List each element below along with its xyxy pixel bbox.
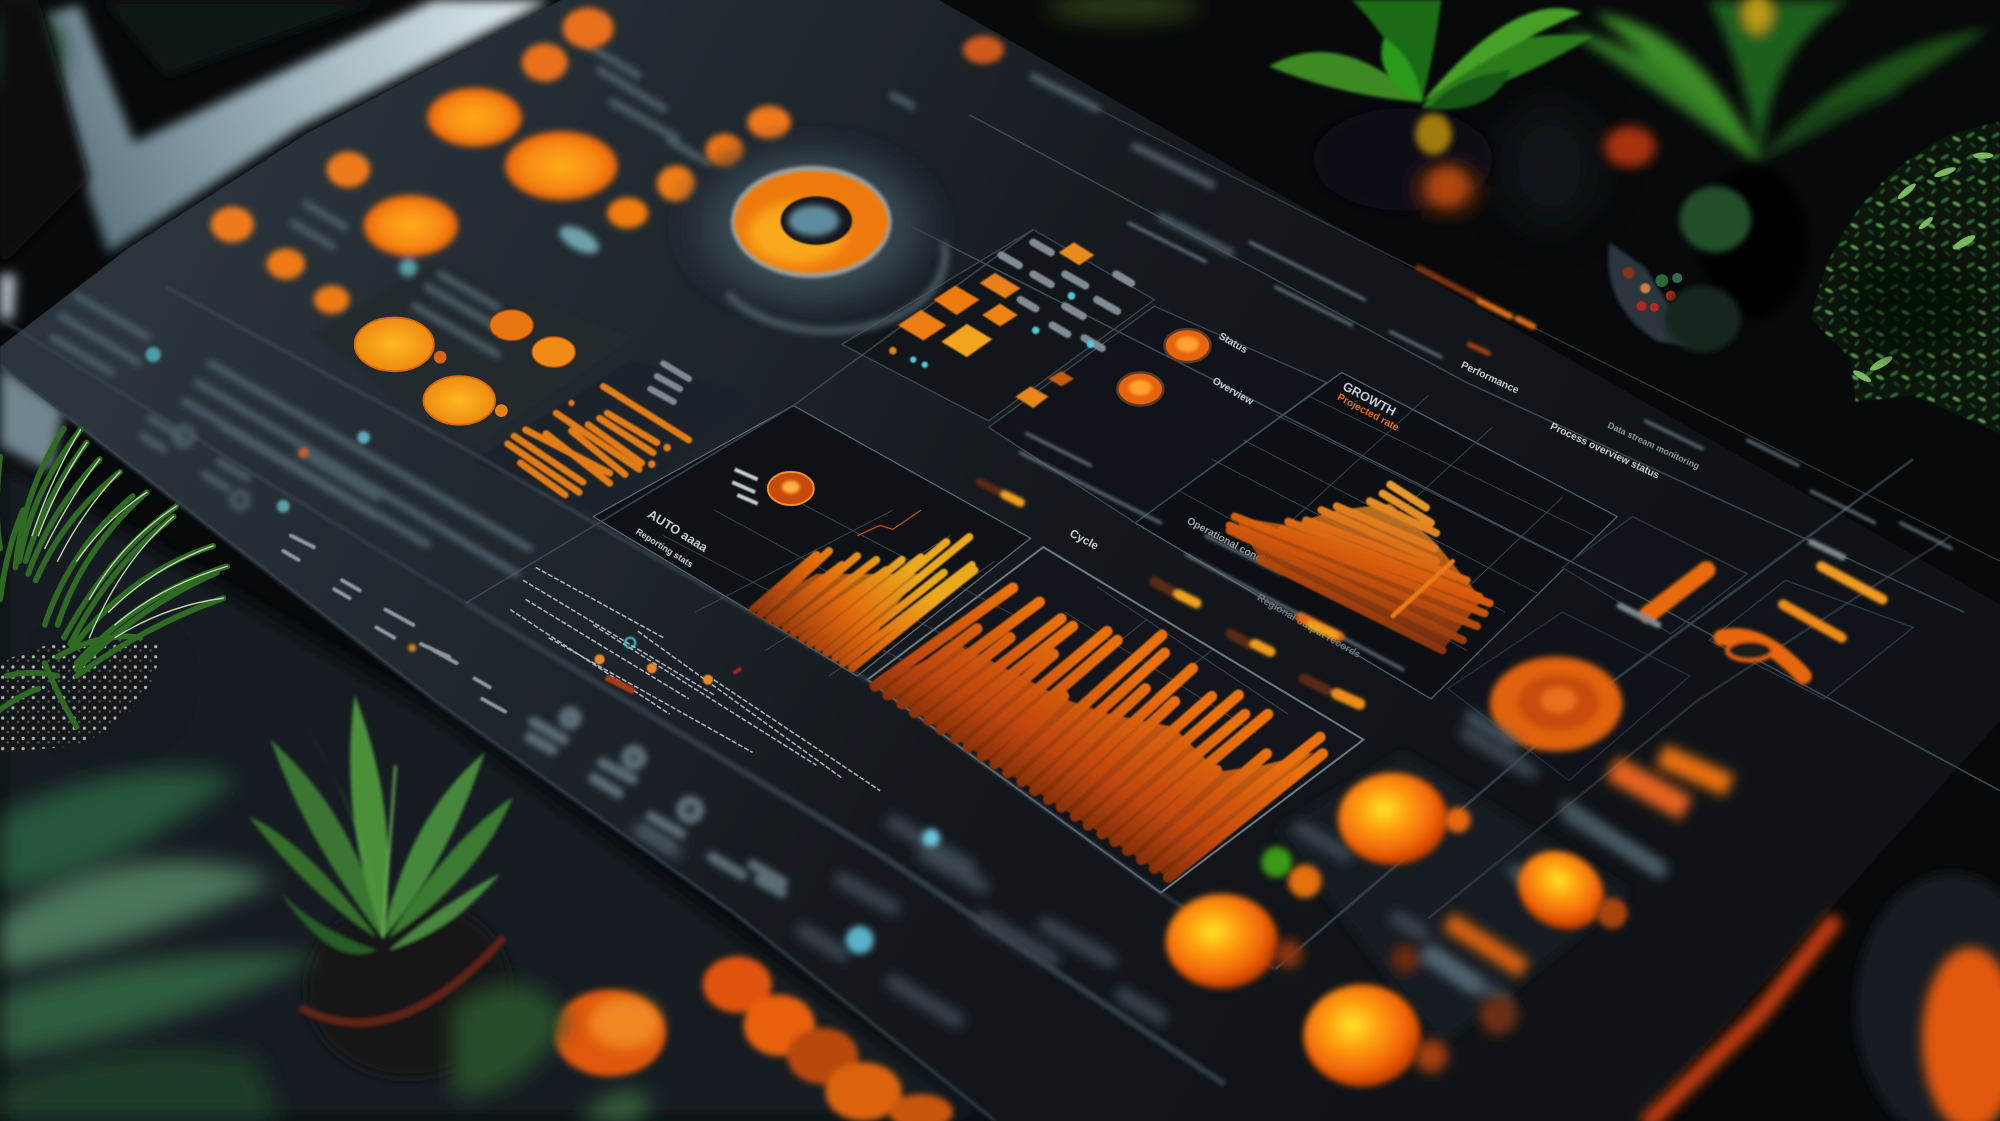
text labels: far chips (638, 733, 1658, 1020)
text labels: crisp tiny captions: Overview (1210, 376, 1255, 408)
chart grids (663, 395, 1594, 733)
text labels: crisp tiny captions: AUTO aaaa (645, 506, 711, 555)
text labels: crisp tiny captions: Data stream monitoring (1606, 420, 1701, 471)
text labels: crisp tiny captions: Status (1217, 331, 1249, 356)
red edge glow (1645, 918, 1837, 1121)
indicator pills (980, 268, 1533, 704)
glowing buttons lower right (1166, 773, 1627, 1087)
status dots on left rows (146, 347, 416, 652)
plant: top centre (1269, 0, 1594, 210)
text labels: crisp tiny captions: Cycle (1067, 528, 1100, 553)
light band: paper reflection (0, 0, 551, 319)
text labels: crisp tiny captions: Reporting stats (634, 526, 695, 569)
circle tiles: blurred upper row (211, 8, 1004, 314)
corner dial (1856, 874, 2000, 1121)
chart panels (313, 230, 1913, 1046)
donut card (1490, 657, 1622, 751)
blurred orange blocks (1392, 714, 1729, 1034)
donut gauge (665, 125, 958, 331)
plant: left fern (0, 429, 227, 774)
text labels: crisp tiny captions: Performance (1459, 360, 1521, 396)
plant: top right (1430, 0, 1990, 204)
blurred controls bottom (554, 829, 953, 1121)
text labels: left column rows (54, 45, 1231, 574)
text labels: lower-left chips (283, 536, 505, 712)
matrix tile cluster (889, 242, 1131, 408)
bar chart: right stacked (1230, 485, 1490, 650)
text labels: lower centre blurred chips (529, 712, 783, 893)
bar chart: main orange (875, 588, 1323, 877)
text labels: crisp tiny captions: Regional output records (1255, 592, 1363, 661)
depth vignette corners (0, 0, 383, 268)
text labels: crisp tiny captions: GROWTH (1340, 378, 1399, 419)
marker tags on rows (594, 638, 741, 691)
bar chart: mid-left gold (753, 537, 974, 668)
blurred leaves foreground (0, 0, 1199, 1121)
bar chart: small orange (508, 363, 689, 495)
circle tiles: sharp discs (355, 310, 575, 425)
text labels: crisp tiny captions: Process overview status (1548, 421, 1661, 482)
right mini cards (1620, 542, 1883, 676)
status badges (1117, 329, 1210, 406)
text labels: crisp tiny captions: Operational conditions (1185, 516, 1288, 578)
chart badge (732, 469, 814, 505)
text labels: crisp tiny captions (634, 331, 1701, 661)
plant: bush and tray (1608, 121, 2000, 434)
text labels: crisp tiny captions: Projected rate (1335, 392, 1401, 434)
line chart trace (857, 510, 921, 536)
plant: lower centre-left (249, 695, 513, 1078)
text labels: crisp pseudo text rows (510, 568, 880, 791)
text labels: upper right lines (1020, 223, 1951, 670)
